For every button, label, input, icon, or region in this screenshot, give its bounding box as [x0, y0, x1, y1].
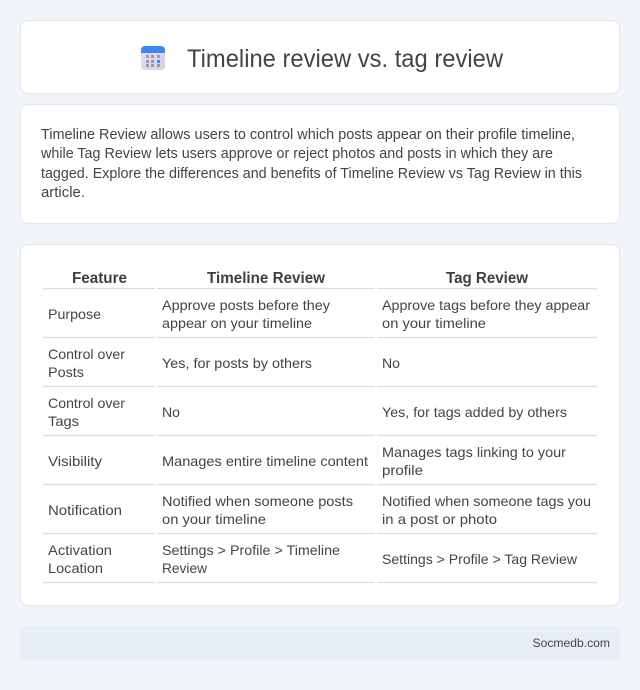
- row: notification: Notified when someone posts: [162, 493, 353, 509]
- row: visibility: Manages tags linking to your: [382, 444, 566, 460]
- row: activation location: Review: [162, 560, 208, 576]
- row: purpose: Approve tags before they appear: [382, 297, 590, 313]
- row: purpose: Purpose: [48, 306, 101, 322]
- panel: comparison table: [20, 244, 620, 606]
- row: purpose: [48, 297, 590, 331]
- row: control over posts: Yes, for posts by others: [162, 355, 312, 371]
- row: activation location: [48, 542, 578, 576]
- row: notification: Notification: [48, 502, 122, 518]
- row: visibility: Visibility: [48, 453, 102, 469]
- row: purpose: Approve posts before they: [162, 297, 330, 313]
- row: control over tags: Tags: [48, 413, 79, 429]
- row: control over tags: [48, 395, 567, 429]
- title: Timeline review vs. tag review: [187, 45, 504, 73]
- table header: [72, 270, 529, 287]
- icon: calendar: [141, 46, 165, 70]
- row: visibility: profile: [382, 462, 423, 478]
- row: activation location: Settings > Profile > Timeline: [162, 542, 340, 558]
- row: visibility: [48, 444, 566, 478]
- row: control over posts: No: [382, 355, 400, 371]
- table header: Timeline Review: [207, 270, 326, 287]
- intro text: Timeline Review allows users to control which posts appear on their profile timeline,: [41, 127, 575, 143]
- intro text: while Tag Review lets users approve or reject photos and posts in which they are: [40, 146, 553, 162]
- table header: Feature: [72, 270, 127, 287]
- row: control over posts: Control over: [48, 346, 125, 362]
- title panel: [20, 20, 620, 94]
- row: control over tags: No: [162, 404, 180, 420]
- row: control over posts: Posts: [48, 364, 84, 380]
- row: notification: [48, 493, 591, 527]
- row: activation location: Settings > Profile > Tag Review: [382, 551, 578, 567]
- row: purpose: appear on your timeline: [162, 315, 312, 331]
- row: control over tags: Control over: [48, 395, 125, 411]
- panel: intro: [20, 104, 620, 224]
- row: control over posts: [48, 346, 400, 380]
- row: activation location: Activation: [48, 542, 112, 558]
- footer source: Socmedb.com: [532, 636, 610, 650]
- intro text: article.: [41, 185, 85, 201]
- table header: Tag Review: [446, 270, 529, 287]
- row: notification: in a post or photo: [382, 511, 497, 527]
- intro text: tagged. Explore the differences and benefits of Timeline Review vs Tag Review in this: [41, 166, 582, 182]
- intro text: [40, 127, 582, 201]
- row: control over tags: Yes, for tags added by others: [382, 404, 567, 420]
- row: purpose: on your timeline: [382, 315, 486, 331]
- row: notification: Notified when someone tags you: [382, 493, 591, 509]
- footer: [20, 626, 620, 660]
- row: activation location: Location: [48, 560, 103, 576]
- row: visibility: Manages entire timeline content: [162, 453, 368, 469]
- row: notification: on your timeline: [162, 511, 266, 527]
